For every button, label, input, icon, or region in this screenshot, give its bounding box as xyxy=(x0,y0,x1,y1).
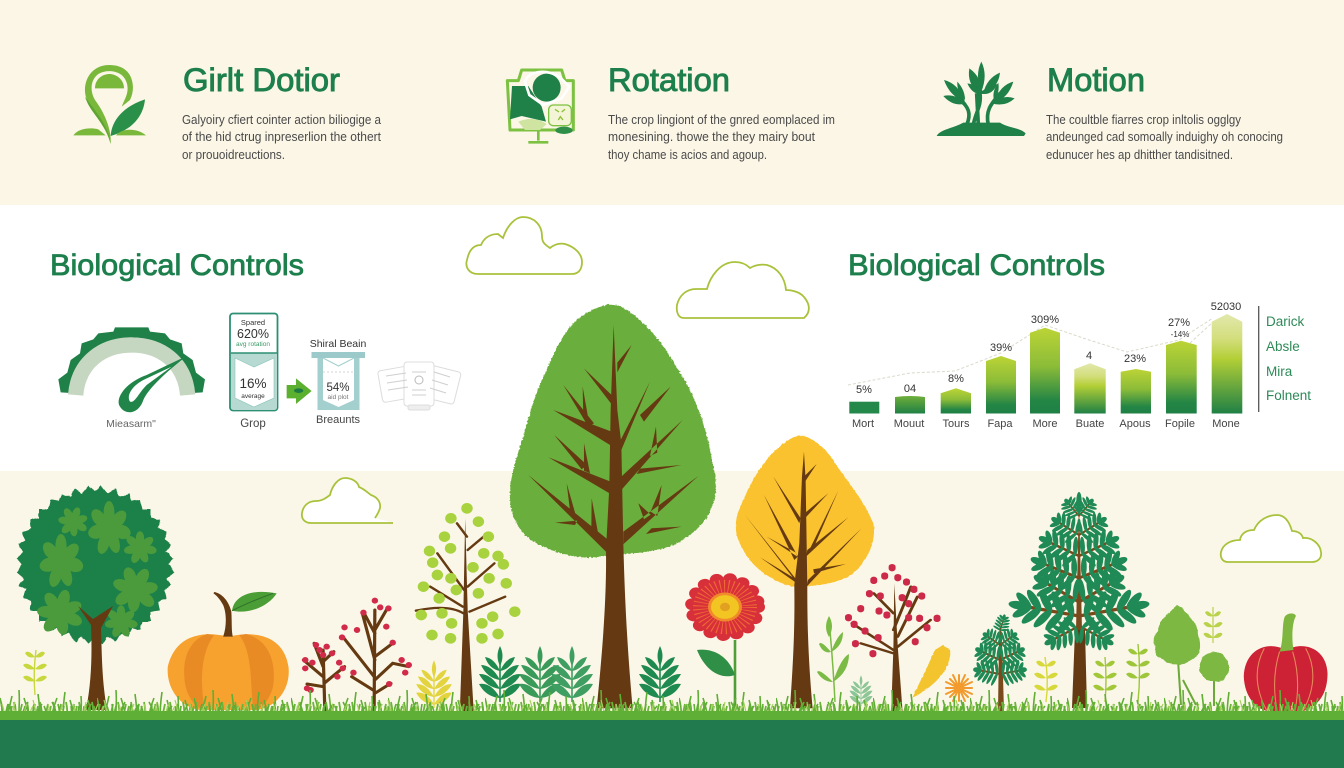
tree: red berry tree xyxy=(848,567,937,712)
plant: small green sprout xyxy=(817,616,849,702)
legend: Absle xyxy=(1266,339,1300,354)
tree: light green sapling xyxy=(416,508,515,712)
icon: fanned pale cards xyxy=(377,362,461,410)
stat card: Breaunts: aid plot xyxy=(328,394,349,401)
icon: red flower xyxy=(692,579,758,712)
text block: Motion description: andeunged cad somoally induighy oh conocing xyxy=(1046,130,1283,144)
legend xyxy=(1259,306,1311,412)
text block: Motion description: The coultble fiarres crop inltolis ogglgy xyxy=(1046,113,1242,127)
icon: red bell pepper xyxy=(1244,613,1328,712)
bar category labels: Buate xyxy=(1076,418,1104,430)
background: top cream band xyxy=(0,0,1344,205)
cloud: lower left xyxy=(302,478,393,523)
text block: Girlt Dotior description xyxy=(182,113,381,162)
cloud: upper middle xyxy=(466,217,582,274)
bar category labels: Mone xyxy=(1212,418,1240,430)
plant: yellow feather xyxy=(912,645,950,698)
icon: pumpkin xyxy=(168,592,289,710)
bar category labels: Fopile xyxy=(1165,418,1195,430)
arrow xyxy=(287,378,312,404)
text block: Rotation description: The crop lingiont of the gnred eomplaced im xyxy=(608,113,835,127)
bar category labels: Mouut xyxy=(894,418,924,430)
gauge label: Mieasarm" xyxy=(106,418,156,430)
bar category labels: Fapa xyxy=(987,418,1013,430)
panel: Motion xyxy=(937,62,1283,162)
legend: Folnent xyxy=(1266,388,1311,403)
plants: small sprigs right of pine xyxy=(1034,644,1150,702)
bar category labels xyxy=(852,418,1240,430)
bar category labels: Mort xyxy=(852,418,874,430)
text block: Rotation description: monesining. thowe the they mairy bout xyxy=(608,130,816,144)
stat card: Grop: Spared xyxy=(241,318,265,327)
text block: Girlt Dotior description: Galyoiry cfiert cointer action biliogige a xyxy=(182,113,381,127)
heading: right Biological Controls: Biological Controls xyxy=(848,249,1105,282)
tree: round dark green tree xyxy=(16,486,174,710)
tree: large pine xyxy=(1005,491,1153,708)
stat card: Grop: 620% xyxy=(237,327,269,341)
bars xyxy=(849,314,1242,414)
cloud: upper right of centre xyxy=(677,262,809,318)
plant: broad leaf shrub xyxy=(1154,606,1200,705)
bar value labels: -14% xyxy=(1171,330,1189,339)
text block: Rotation description xyxy=(608,113,835,162)
bar value labels: 8% xyxy=(948,373,964,385)
bar value labels: 39% xyxy=(990,342,1012,354)
cloud: lower right xyxy=(1221,515,1321,562)
bar value labels: 52030 xyxy=(1211,301,1241,313)
text block: Motion description xyxy=(1046,113,1283,162)
bar chart xyxy=(848,301,1311,430)
stat card: Breaunts xyxy=(310,338,366,426)
heading: Rotation: Rotation xyxy=(608,62,730,98)
bar value labels: 27% xyxy=(1168,317,1190,329)
bar value labels: 23% xyxy=(1124,353,1146,365)
text block: Motion description: edunucer hes ap dhitther tandisitned. xyxy=(1046,148,1233,162)
plant: yellow fern xyxy=(416,660,452,708)
bar value labels: 4 xyxy=(1086,350,1092,362)
stat card: Grop: average xyxy=(241,393,265,400)
bar category labels: Tours xyxy=(943,418,970,430)
stat card: Grop: Grop xyxy=(240,418,266,430)
bar value labels: 5% xyxy=(856,384,872,396)
shrub: red berry bushes xyxy=(303,601,409,712)
legend: Darick xyxy=(1266,314,1305,329)
background: lower cream band xyxy=(0,471,1344,721)
gauge dial xyxy=(58,327,205,412)
plant: yellow sprig far left xyxy=(23,650,47,695)
grass strip xyxy=(0,680,1344,720)
heading: left Biological Controls: Biological Controls xyxy=(50,249,304,282)
icon: plant on mound xyxy=(937,62,1026,136)
stat card: Grop xyxy=(230,314,278,430)
icon: leaf location pin xyxy=(73,65,146,144)
ground band xyxy=(0,720,1344,768)
tree: central green tree xyxy=(510,304,716,708)
stat card: Breaunts: 54% xyxy=(326,382,350,394)
stat card: Breaunts: Shiral Beain xyxy=(310,338,366,350)
legend: Mira xyxy=(1266,364,1293,379)
bar value labels: 309% xyxy=(1031,314,1059,326)
icon: rotation monitor xyxy=(507,70,573,142)
bar category labels: More xyxy=(1032,418,1058,430)
stat card: Grop: 16% xyxy=(239,376,267,391)
bar value labels: 04 xyxy=(904,383,916,395)
dashed trend line xyxy=(848,318,1213,385)
plants: green ferns row xyxy=(479,646,681,702)
plant: small round shrub xyxy=(1199,652,1229,706)
stat card: Breaunts: Breaunts xyxy=(316,414,361,426)
background: middle white band xyxy=(0,205,1344,471)
tree: yellow tree xyxy=(736,436,874,708)
text block: Rotation description: thoy chame is acios and agoup. xyxy=(608,148,767,162)
stat card: Grop: avg rotation xyxy=(236,341,270,348)
plant: pale fern xyxy=(849,675,873,706)
gauge chart xyxy=(58,327,205,430)
tree: small pine xyxy=(969,612,1031,712)
text block: Girlt Dotior description: of the hid ctrug inpreserlion the othert xyxy=(182,130,381,144)
plant: yellow-green sprig xyxy=(1203,607,1223,643)
heading: Motion: Motion xyxy=(1047,62,1145,98)
icon: orange star plant xyxy=(946,675,972,701)
text block: Girlt Dotior description: or prouoidreuctions. xyxy=(182,148,285,162)
panel: Rotation xyxy=(507,62,835,162)
bar category labels: Apous xyxy=(1119,418,1151,430)
panel: Girlt Dotior xyxy=(73,62,381,162)
bar value labels xyxy=(856,301,1241,396)
heading: Girlt Dotior: Girlt Dotior xyxy=(183,62,340,98)
